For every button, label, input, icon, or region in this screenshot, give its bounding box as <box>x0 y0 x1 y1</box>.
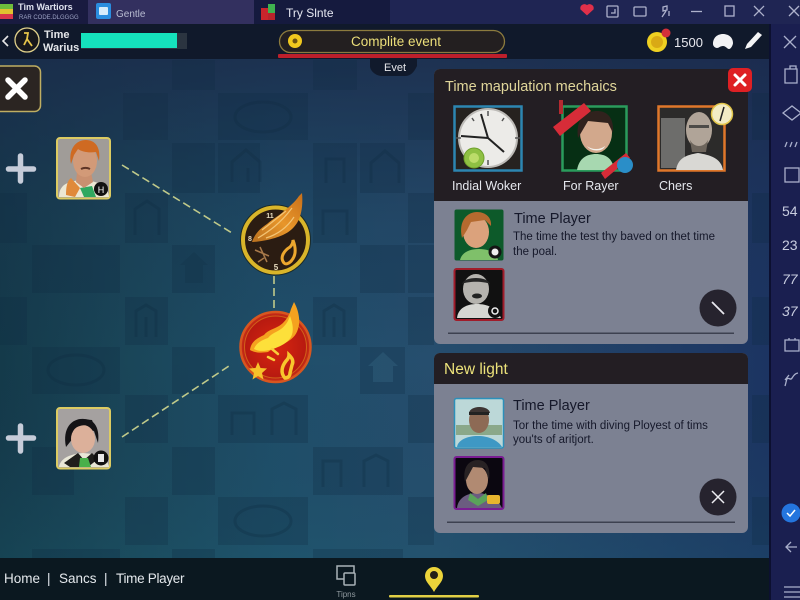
medallion: clock wing: 11 <box>266 213 274 220</box>
card: for player <box>553 100 633 193</box>
sidebar back arrow <box>786 542 797 552</box>
entry description: you'ts of aritjort. <box>513 434 594 446</box>
coin counter: 1500 <box>674 35 703 50</box>
sidebar bag icon <box>785 66 797 83</box>
sidebar numbers: 23 <box>782 237 798 253</box>
avatar: red <box>454 269 504 320</box>
progress bar <box>81 33 187 49</box>
sidebar squiggle icon <box>785 373 798 386</box>
tab: Try Slnte: Try Slnte <box>286 6 334 20</box>
right sidebar <box>769 24 800 600</box>
medallion: clock wing: 5 <box>274 263 279 272</box>
objective pill: Complete event: Complite event <box>351 34 441 49</box>
tab: Gentle <box>88 0 254 24</box>
card label: For Rayer <box>563 179 619 193</box>
card: clock <box>452 106 522 193</box>
bottom navigation bar <box>0 558 771 600</box>
panel: new light <box>434 353 748 533</box>
bottom navigation bar: Sancs <box>59 571 97 586</box>
entry description: The time the test thy baved on thet time <box>513 231 715 243</box>
panel heading: Time mapulation mechaics <box>445 79 617 95</box>
medallion: fire <box>240 302 310 382</box>
close button red <box>728 68 752 92</box>
coin counter <box>647 28 703 52</box>
nav item: tips: Tipns <box>336 590 356 599</box>
plus icon bottom <box>8 426 34 451</box>
entry title: Time Player <box>513 398 590 414</box>
panel heading: New light <box>444 361 508 378</box>
avatar: purple <box>454 457 504 509</box>
entry description: Tor the time with diving Ployest of tims <box>513 420 708 432</box>
round action button <box>700 290 736 326</box>
sidebar close icon <box>784 36 796 48</box>
back arrow <box>3 36 8 46</box>
sidebar check badge <box>782 504 800 522</box>
window title bar with tabs <box>0 0 800 24</box>
entry title: Time Player <box>514 211 591 227</box>
tab: Try Slnte <box>254 0 390 24</box>
card label: Indial Woker <box>452 179 521 193</box>
objective pill: Complete event <box>278 30 507 58</box>
window controls <box>581 5 799 17</box>
tab: Time Warriors: Tìm Wartiors <box>18 2 73 12</box>
game name: Time <box>44 29 69 41</box>
game name: Warius <box>43 42 79 54</box>
portrait: bottom player <box>57 408 110 468</box>
avatar: teal <box>454 398 504 448</box>
portrait: top player <box>57 138 110 198</box>
tab: Time Warriors: RAR CODE.DLGGGG <box>19 15 79 21</box>
icon: game emblem <box>15 28 39 52</box>
tab label: Evet <box>370 58 417 76</box>
tab: Time Warriors <box>0 0 88 24</box>
sidebar diamond icon <box>783 106 800 120</box>
card: others <box>658 104 732 193</box>
bottom navigation bar: | <box>104 571 108 586</box>
nav item: map pin active <box>389 567 479 598</box>
sidebar numbers <box>782 203 799 319</box>
bottom navigation bar: Time Player <box>116 571 185 586</box>
sidebar slashes icon <box>785 142 797 147</box>
avatar: green <box>454 210 504 260</box>
icon: helmet <box>713 34 733 49</box>
top game bar <box>0 24 771 59</box>
sidebar numbers: 37 <box>782 303 799 319</box>
icon: pencil <box>745 32 762 49</box>
medallion: clock wing: 8 <box>248 236 252 243</box>
card label: Chers <box>659 179 692 193</box>
tab: Gentle: Gentle <box>116 9 146 20</box>
bottom navigation bar: | <box>47 571 51 586</box>
nav item: tips <box>336 566 356 599</box>
tab label: Evet: Evet <box>384 62 406 74</box>
round close button <box>700 478 736 516</box>
plus icon top <box>8 156 34 181</box>
sidebar box icon <box>785 168 799 182</box>
sidebar menu icon <box>784 587 800 597</box>
breadcrumb: Home <box>4 571 40 586</box>
portrait: top player: H <box>98 185 104 195</box>
sidebar numbers: 54 <box>782 203 798 219</box>
panel: time manipulation mechanics <box>434 68 752 344</box>
entry description: the poal. <box>513 246 557 258</box>
sidebar numbers: 77 <box>782 271 799 287</box>
medallion: clock wing <box>240 193 310 275</box>
sidebar battery icon <box>785 338 799 351</box>
close button left <box>0 66 40 112</box>
connector lines <box>122 165 274 437</box>
